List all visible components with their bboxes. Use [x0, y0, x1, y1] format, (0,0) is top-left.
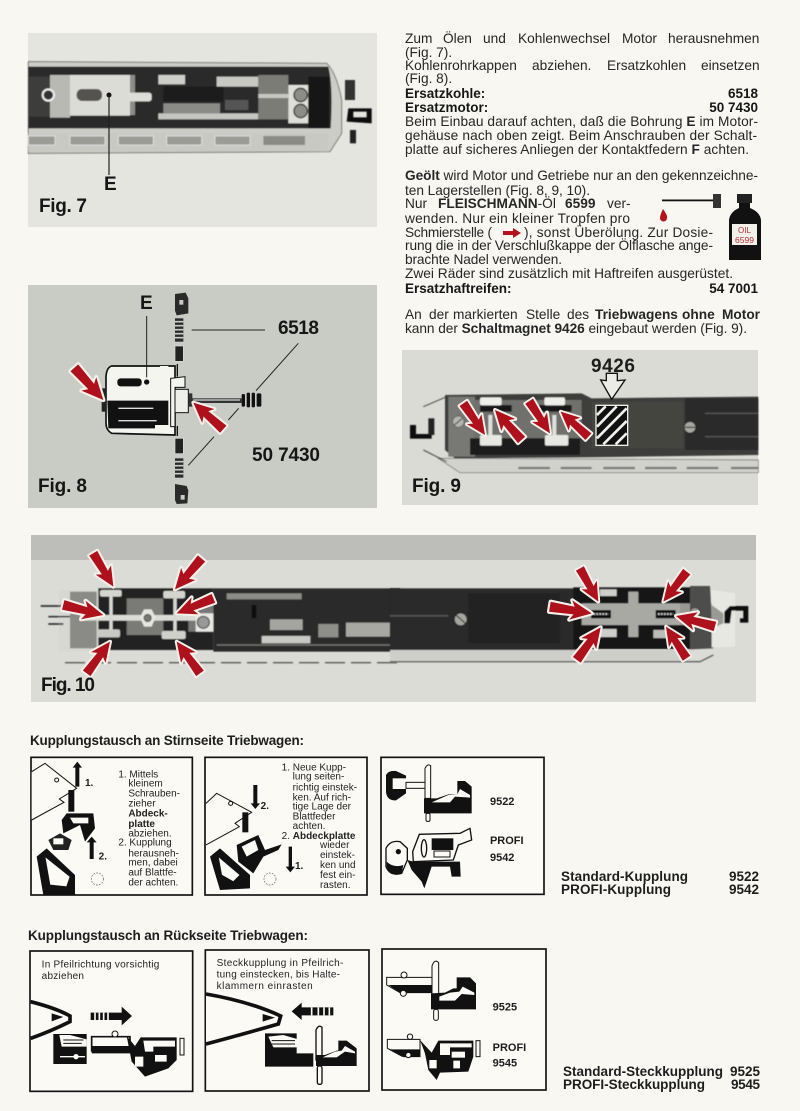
- text block: motor and carbon replacement: [405, 31, 760, 157]
- panel: Fig. 10 full underside photo: [31, 535, 756, 702]
- instructions: lung seiten-: [293, 772, 344, 783]
- text block: oiling instructions: 6599: [565, 196, 596, 211]
- text block: motor and carbon replacement: Beim Einbau darauf achten, daß die Bohrung E im Motor-: [405, 114, 758, 129]
- icon: oil bottle 6599: 6599: [735, 235, 754, 245]
- instructions: 1. Neue Kupp-: [282, 763, 346, 774]
- text block: oiling instructions: Ersatzhaftreifen:: [405, 281, 512, 296]
- panel: front coupling types: [381, 757, 544, 894]
- panel: rear coupling step 1: [30, 951, 193, 1091]
- text block: oiling instructions: Zwei Räder sind zusätzlich mit Haftreifen ausgerüstet.: [405, 266, 733, 281]
- arrows: left bogie lubrication points: [61, 549, 217, 679]
- instructions: abziehen.: [128, 828, 172, 839]
- label: 6518: 6518: [278, 318, 319, 339]
- text block: switching magnet note: Motor: [722, 307, 761, 322]
- photo: locomotive underside: [410, 373, 758, 473]
- parts list: rear couplings: 9525: [730, 1064, 760, 1079]
- heading: front coupling replacement: Kupplungstausch an Stirnseite Triebwagen:: [30, 733, 304, 748]
- text block: switching magnet note: Triebwagens: [595, 307, 678, 322]
- panel: Fig. 8 motor diagram: [28, 285, 377, 508]
- parts list: front couplings: 9542: [729, 882, 759, 897]
- text block: switching magnet note: ohne: [682, 307, 715, 322]
- instructions: achten.: [293, 821, 325, 832]
- drawing: inserted coupling: [265, 1026, 357, 1084]
- instructions: platte: [128, 819, 155, 830]
- instructions: 2. Abdeckplatte: [282, 831, 356, 842]
- drawing: coupling 9542: [386, 828, 472, 888]
- labels: 9522: [490, 796, 514, 808]
- text block: motor and carbon replacement: Kohlenwechsel: [518, 31, 610, 46]
- label: 9426: 9426: [591, 356, 635, 377]
- parts list: front couplings: 9522: [729, 869, 759, 884]
- instructions: einstek-: [320, 850, 355, 861]
- instruction: klammern einrasten: [217, 981, 313, 992]
- instructions: Blattfeder: [293, 812, 336, 823]
- label: Fig. 9: Fig. 9: [412, 476, 461, 497]
- callout: bore E: E: [104, 174, 117, 195]
- labels: 9545: [493, 1058, 517, 1070]
- parts list: rear couplings: Standard-Steckkupplung: [563, 1064, 723, 1079]
- labels: PROFI: [493, 1042, 526, 1054]
- text block: motor and carbon replacement: Motor: [622, 31, 657, 46]
- text block: switching magnet note: der: [429, 307, 449, 322]
- photo: right bogie and nose: [390, 564, 748, 665]
- text block: oiling instructions: ), sonst Überölung. Zur Dosie-: [524, 225, 713, 240]
- labels: [490, 796, 524, 864]
- instructions: 2. Kupplung: [118, 838, 172, 849]
- text block: oiling instructions: ver-: [607, 196, 631, 211]
- photo: left bogie and body: [41, 549, 400, 679]
- instructions: ken. Auf rich-: [293, 792, 351, 803]
- text block: motor and carbon replacement: abziehen.: [532, 58, 591, 73]
- instructions: rasten.: [320, 880, 351, 891]
- instruction: tung einstecken, bis Halte-: [217, 970, 340, 981]
- text block: oiling instructions: brachte Nadel verwenden.: [405, 252, 562, 267]
- arrow: oil point right: [187, 396, 229, 436]
- instructions: Abdeck-: [128, 808, 168, 819]
- hollow arrow to magnet position: [601, 373, 625, 399]
- instruction: Steckkupplung in Pfeilrich-: [217, 958, 343, 969]
- text block: motor and carbon replacement: Kohlenrohrkappen: [405, 58, 517, 73]
- text block: switching magnet note: An: [405, 307, 422, 322]
- text block: switching magnet note: des: [567, 307, 589, 322]
- text block: switching magnet note: kann der Schaltmagnet 9426 eingebaut werden (Fig. 9).: [405, 321, 747, 336]
- label: Fig. 7: Fig. 7: [39, 196, 87, 217]
- arrows: lubrication points: [456, 396, 594, 446]
- instructions: ken und: [320, 860, 356, 871]
- icon: oil bottle 6599: [729, 194, 761, 260]
- text block: motor and carbon replacement: (Fig. 7).: [405, 45, 452, 60]
- panel: Fig. 7 motor photo: [28, 33, 377, 227]
- parts list: front couplings: PROFI-Kupplung: [561, 882, 671, 897]
- instructions: tige Lage der: [293, 802, 352, 813]
- labels: [493, 1002, 526, 1070]
- text block: motor and carbon replacement: platte auf sicheres Anliegen der Kontaktfedern F achten.: [405, 142, 749, 157]
- instruction: [217, 958, 343, 992]
- instructions: wieder: [319, 840, 350, 851]
- parts list: rear couplings: 9545: [731, 1077, 760, 1092]
- arrow labels: [85, 778, 107, 863]
- text block: motor and carbon replacement: und: [483, 31, 506, 46]
- text block: motor and carbon replacement: Ersatzkohlen: [607, 58, 686, 73]
- text block: motor and carbon replacement: herausnehmen: [668, 31, 759, 46]
- instruction: In Pfeilrichtung vorsichtig: [42, 959, 159, 970]
- text block: oiling instructions: -Öl: [538, 196, 556, 211]
- text block: motor and carbon replacement: 50 7430: [709, 100, 758, 115]
- arrow labels: 2.: [261, 801, 269, 812]
- drawing: pulled coupling: [53, 1031, 184, 1077]
- drawing: coupling insertion: [206, 785, 295, 890]
- instructions: 1. Mittels: [118, 769, 158, 780]
- instructions: [118, 769, 180, 889]
- label: 50 7430: 50 7430: [252, 445, 320, 466]
- instructions: auf Blattfe-: [128, 868, 177, 879]
- panel: front coupling step 2: [205, 757, 367, 895]
- instructions: kleinem: [128, 778, 163, 789]
- text block: motor and carbon replacement: Ersatzkohle:: [405, 86, 485, 101]
- instruction: [42, 959, 159, 982]
- panel: Fig. 9 underside photo: [402, 350, 758, 505]
- instructions: [282, 763, 357, 891]
- drawing: cover plate removal: [32, 762, 103, 895]
- text block: motor and carbon replacement: gehäuse nach oben zeigt. Beim Anschrauben der Schalt-: [405, 128, 757, 143]
- drawing: coupling 9522: [386, 765, 472, 821]
- text block: oiling instructions: 54 7001: [709, 281, 758, 296]
- label: Fig. 8: Fig. 8: [38, 476, 87, 497]
- panel: front coupling step 1: [31, 757, 192, 895]
- arrow: insert direction: [292, 1003, 333, 1020]
- callout: bore E: [104, 92, 117, 195]
- parts list: rear couplings: [563, 1064, 760, 1092]
- labels: 9525: [493, 1002, 517, 1014]
- drawing: loco nose: [206, 994, 281, 1044]
- text block: switching magnet note: Stelle: [526, 307, 560, 322]
- arrow: pull direction: [91, 1007, 132, 1025]
- icon: small red arrow: [503, 228, 521, 238]
- text block: oiling instructions: ten Lagerstellen (Fig. 8, 9, 10).: [405, 183, 590, 198]
- text block: motor and carbon replacement: Zum: [405, 31, 432, 46]
- drawing: loco nose: [31, 1002, 70, 1038]
- drawing: coupling 9545: [387, 1034, 480, 1080]
- heading: rear coupling replacement: Kupplungstausch an Rückseite Triebwagen:: [28, 928, 308, 943]
- instructions: fest ein-: [320, 870, 356, 881]
- icon: oil needle with drop: [660, 194, 721, 222]
- icon: oil bottle 6599: OIL: [738, 226, 751, 235]
- arrow labels: 2.: [99, 852, 107, 863]
- labels: PROFI: [490, 835, 524, 847]
- text block: oiling instructions: [404, 168, 758, 296]
- text block: motor and carbon replacement: (Fig. 8).: [405, 71, 452, 86]
- instructions: herausneh-: [128, 848, 179, 859]
- instructions: richtig einstek-: [293, 782, 357, 793]
- arrow labels: 1.: [85, 778, 94, 789]
- hatched magnet position: [596, 405, 628, 445]
- instructions: Schrauben-: [128, 788, 180, 799]
- arrows: right bogie lubrication points: [548, 564, 717, 665]
- arrow: oil point left: [67, 361, 111, 407]
- instruction: abziehen: [42, 971, 84, 982]
- label: E: E: [140, 293, 153, 314]
- text block: oiling instructions: Geölt wird Motor und Getriebe nur an den gekennzeichne-: [405, 168, 758, 183]
- text block: motor and carbon replacement: Ölen: [443, 31, 472, 46]
- parts list: front couplings: Standard-Kupplung: [561, 869, 688, 884]
- text block: motor and carbon replacement: 6518: [728, 86, 758, 101]
- text block: oiling instructions: rung die in der Verschlußkappe der Ölflasche ange-: [405, 238, 713, 253]
- drawing: coupling 9525: [387, 961, 476, 1020]
- text block: oiling instructions: Nur: [405, 196, 427, 211]
- diagram: motor and carbon brushes: [67, 293, 298, 504]
- label: Fig. 10: Fig. 10: [41, 675, 95, 696]
- arrow labels: 1.: [295, 861, 304, 872]
- instructions: men, dabei: [128, 858, 178, 869]
- arrow labels: [261, 801, 304, 872]
- text block: motor and carbon replacement: einsetzen: [701, 58, 760, 73]
- text block: oiling instructions: wenden. Nur ein kleiner Tropfen pro: [404, 211, 630, 226]
- text block: switching magnet note: [405, 307, 761, 336]
- parts list: rear couplings: PROFI-Steckkupplung: [563, 1077, 705, 1092]
- instructions: der achten.: [128, 878, 178, 889]
- text block: oiling instructions: Schmierstelle (: [405, 225, 492, 240]
- parts list: front couplings: [561, 869, 759, 897]
- panel: rear coupling types: [382, 949, 546, 1090]
- panel: rear coupling step 2: [205, 950, 369, 1091]
- instructions: zieher: [128, 798, 156, 809]
- photo: locomotive interior: [28, 62, 372, 153]
- text block: oiling instructions: FLEISCHMANN: [438, 196, 538, 211]
- text block: motor and carbon replacement: Ersatzmotor:: [405, 100, 488, 115]
- text block: switching magnet note: markierten: [453, 307, 518, 322]
- labels: 9542: [490, 852, 514, 864]
